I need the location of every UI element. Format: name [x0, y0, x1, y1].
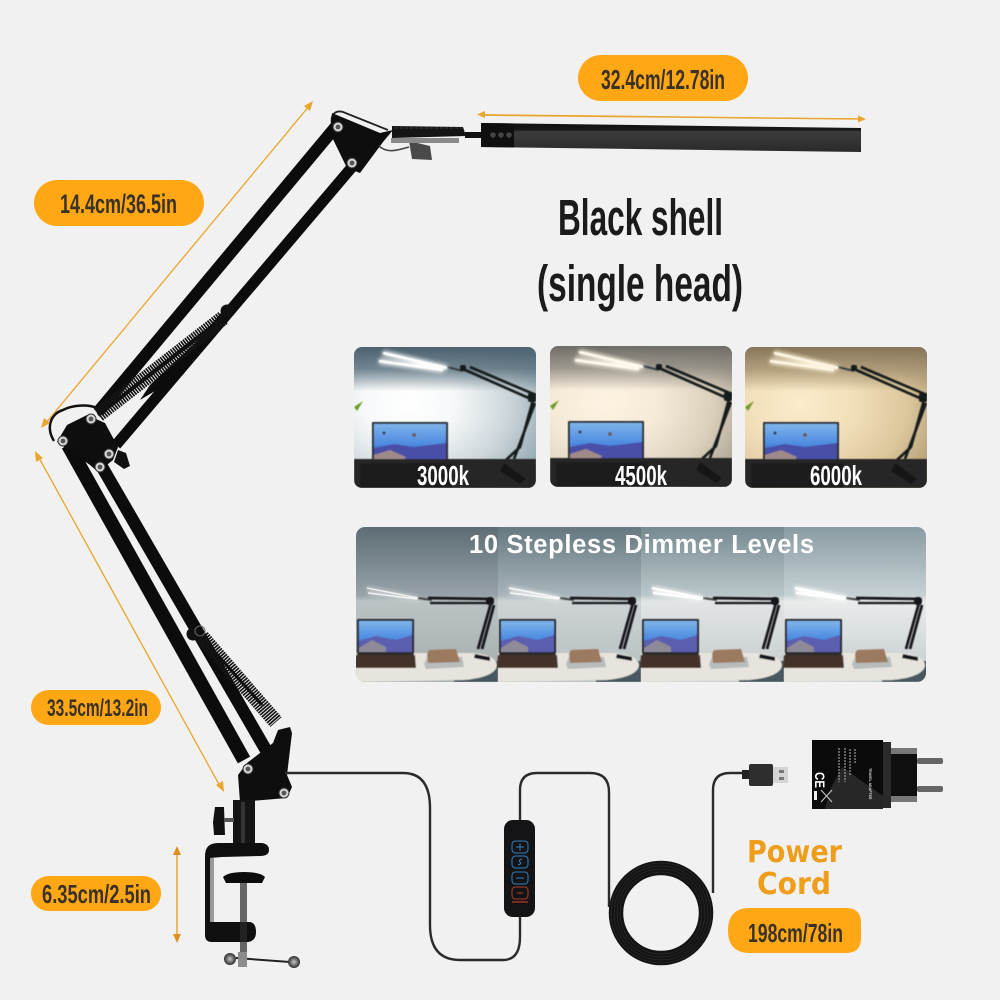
- usb plug: [742, 764, 788, 786]
- lamp: arm assembly: [50, 112, 459, 760]
- elbow joint: [50, 406, 130, 472]
- photo: 4500k: [550, 346, 732, 491]
- cable coil: [611, 863, 711, 963]
- power adapter: TRAVEL ADAPTER: [868, 768, 872, 800]
- neck grip: [392, 126, 466, 138]
- knob: [213, 807, 225, 835]
- power cord label: Power: [747, 835, 842, 870]
- photo strip: dimmer levels: [355, 527, 928, 682]
- dimension arrow: head length: [477, 111, 866, 122]
- level 3: [640, 527, 785, 682]
- power cord label: [747, 835, 842, 902]
- base clamp: [205, 727, 300, 968]
- dimension arrow: upper arm: [41, 101, 313, 428]
- pill: head length: [578, 55, 748, 101]
- dimension arrow: clamp opening: [173, 846, 181, 943]
- pill: clamp opening: 6.35cm/2.5in: [42, 879, 151, 909]
- photo: 6000k: [745, 347, 927, 491]
- light bar shell: [481, 123, 861, 152]
- clamp body: [205, 843, 269, 942]
- dimmer switch: [504, 820, 535, 917]
- level 1: [355, 527, 500, 682]
- plug pins: [917, 758, 943, 764]
- top bracket: [330, 112, 459, 173]
- pill: lower arm length: 33.5cm/13.2in: [47, 695, 148, 722]
- lower arm spring: [186, 626, 276, 722]
- heading: black shell: Black shell: [558, 189, 723, 246]
- cable loop and clip: [379, 146, 409, 151]
- post: [233, 800, 255, 850]
- dimmer title: 10 Stepless Dimmer Levels: [469, 531, 814, 559]
- pill: upper arm length: 14.4cm/36.5in: [60, 189, 177, 219]
- base bracket: [238, 727, 292, 802]
- heading: black shell: (single head): [537, 255, 743, 312]
- power adapter: [812, 740, 943, 809]
- adapter marks: CE: [812, 772, 828, 788]
- lower arm bars: [68, 445, 270, 760]
- photo: 3000k: [354, 347, 536, 491]
- level 2: [497, 527, 642, 682]
- photo: 3000k: 3000k: [417, 460, 469, 491]
- upper arm spring: [98, 304, 234, 415]
- photo: 6000k: 6000k: [810, 460, 862, 491]
- power cord label: Cord: [757, 867, 831, 902]
- pill: head length: 32.4cm/12.78in: [601, 64, 725, 95]
- buttons: [512, 841, 528, 899]
- pill: clamp opening: [31, 876, 161, 911]
- pill: cord length: 198cm/78in: [748, 918, 843, 948]
- photo: 4500k: 4500k: [615, 460, 667, 491]
- upper arm bars: [98, 124, 358, 445]
- heading: black shell: [537, 189, 743, 312]
- dimension arrow: lower arm: [35, 451, 224, 792]
- lamp head: [392, 123, 861, 152]
- pill: upper arm length: [34, 180, 204, 226]
- power cable: [285, 773, 744, 960]
- level 4: [783, 527, 928, 682]
- pill: lower arm length: [31, 690, 161, 725]
- pill: cord length: [728, 908, 861, 953]
- clamp screw: [240, 880, 247, 965]
